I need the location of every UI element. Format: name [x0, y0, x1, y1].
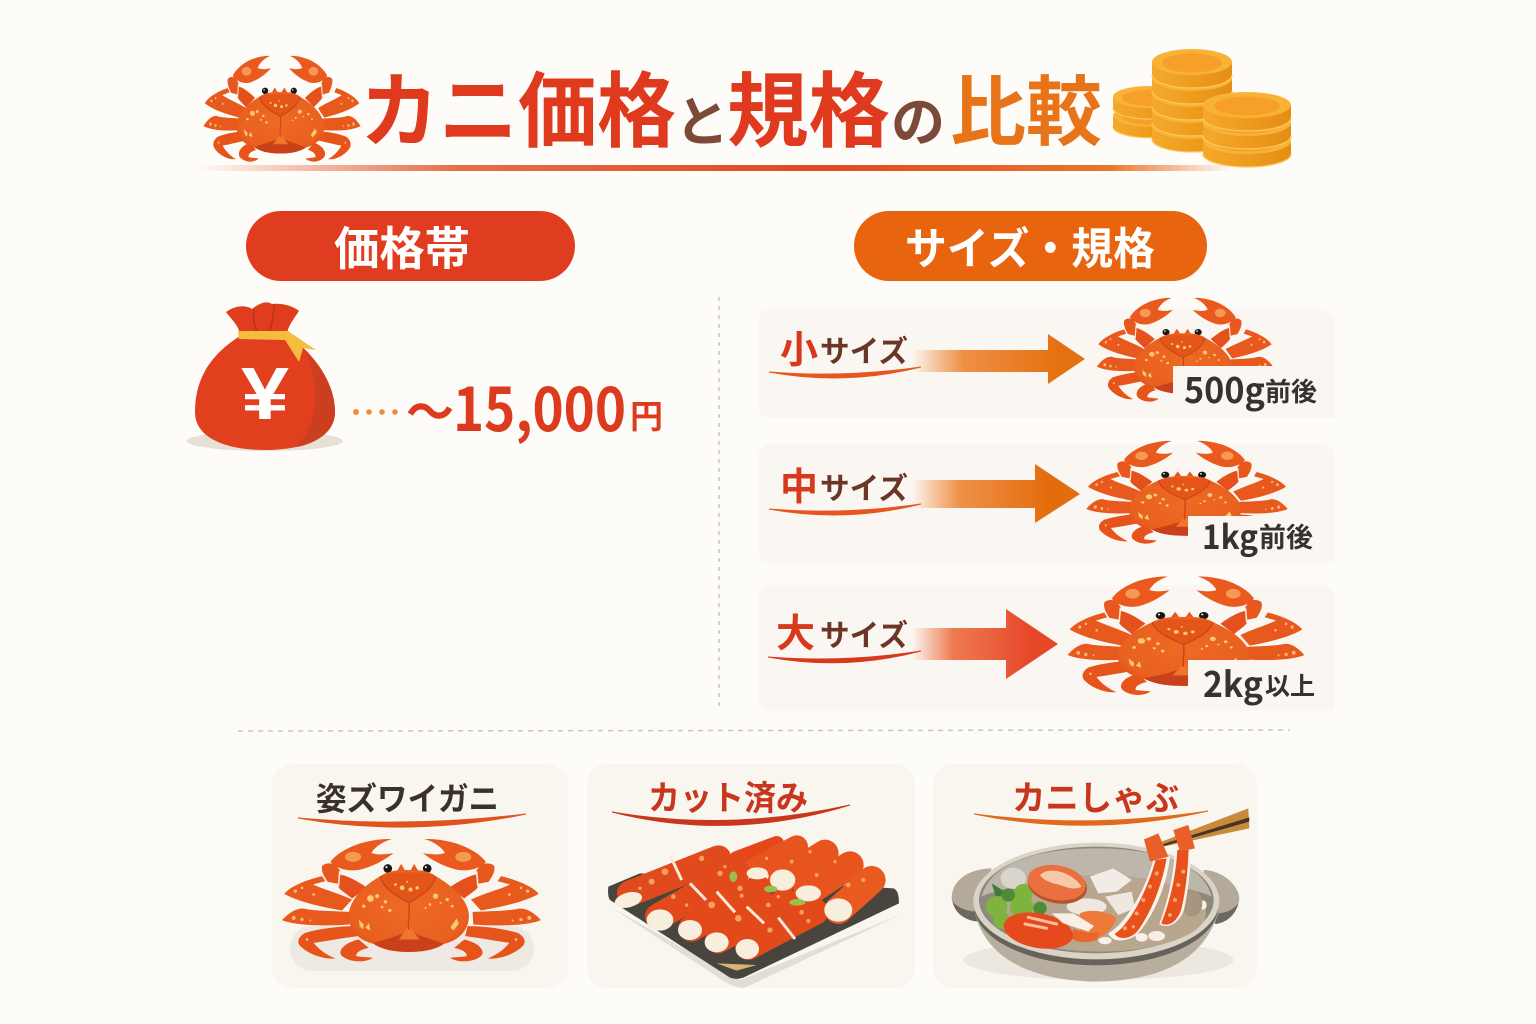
row label: サイズ	[820, 611, 908, 655]
weight label: 500g	[1184, 363, 1265, 414]
arrow	[912, 609, 1058, 679]
icon: money bag	[187, 302, 343, 451]
heading: title text: カニ価格	[360, 45, 676, 164]
row label	[780, 456, 908, 511]
row label: 小	[780, 319, 818, 374]
card title: 姿ズワイガニ	[316, 774, 499, 820]
underline	[974, 811, 1208, 825]
weight label	[1173, 363, 1335, 418]
heading: title text: の	[891, 78, 945, 157]
row label	[776, 603, 908, 659]
icon: crab	[282, 839, 541, 961]
crab shadow	[290, 926, 534, 971]
weight label	[1188, 511, 1335, 563]
row label: サイズ	[820, 327, 908, 371]
pill heading: price band: 価格帯	[334, 213, 470, 279]
price text: 15,000	[453, 362, 626, 449]
underline	[298, 814, 526, 827]
weight label: 前後	[1259, 516, 1313, 555]
pill heading: size and spec	[854, 211, 1207, 281]
icon: crab	[1068, 576, 1304, 695]
card title: カット済み	[648, 771, 808, 820]
panel: large size	[758, 576, 1335, 711]
icon: title crab	[203, 56, 361, 162]
illustration: cut crab legs on tray	[608, 843, 900, 988]
row label: サイズ	[820, 464, 908, 508]
title	[197, 45, 1291, 171]
panel: small size	[758, 298, 1335, 418]
panel: whole snow crab	[272, 764, 568, 988]
weight label: 以上	[1265, 667, 1315, 703]
title underline	[197, 165, 1232, 171]
price text: ～	[406, 373, 454, 445]
pill heading: price band	[246, 211, 575, 281]
vertical divider	[718, 297, 720, 707]
weight label: 前後	[1265, 372, 1317, 409]
arrow	[912, 334, 1085, 384]
underline	[769, 367, 921, 378]
icon: gold coins	[1113, 49, 1291, 167]
illustration: shabu-shabu pot	[952, 808, 1249, 982]
pill heading: size and spec: サイズ・規格	[905, 213, 1155, 277]
yen symbol: ¥	[241, 352, 289, 435]
weight label: 2kg	[1203, 657, 1263, 708]
heading: title text: と	[675, 78, 729, 157]
horizontal divider	[238, 730, 1290, 731]
price text: 円	[630, 390, 663, 438]
card title: カニしゃぶ	[1012, 771, 1179, 820]
panel: pre-cut crab	[587, 764, 915, 988]
dotted leader	[353, 409, 398, 415]
underline	[769, 504, 921, 515]
row label: 大	[776, 603, 815, 659]
weight label: 1kg	[1202, 511, 1258, 559]
heading: title text: 規格	[727, 45, 890, 164]
panel: crab shabu-shabu	[933, 764, 1257, 988]
heading: title text: 比較	[950, 51, 1102, 161]
row label	[780, 319, 908, 374]
panel: medium size	[758, 441, 1335, 563]
row label: 中	[780, 456, 818, 511]
underline	[612, 805, 850, 825]
icon: crab	[1097, 298, 1273, 402]
arrow	[912, 464, 1080, 523]
heading: title text	[360, 45, 1102, 164]
icon: crab	[1086, 441, 1288, 544]
weight label	[1188, 657, 1335, 711]
underline	[768, 651, 921, 663]
